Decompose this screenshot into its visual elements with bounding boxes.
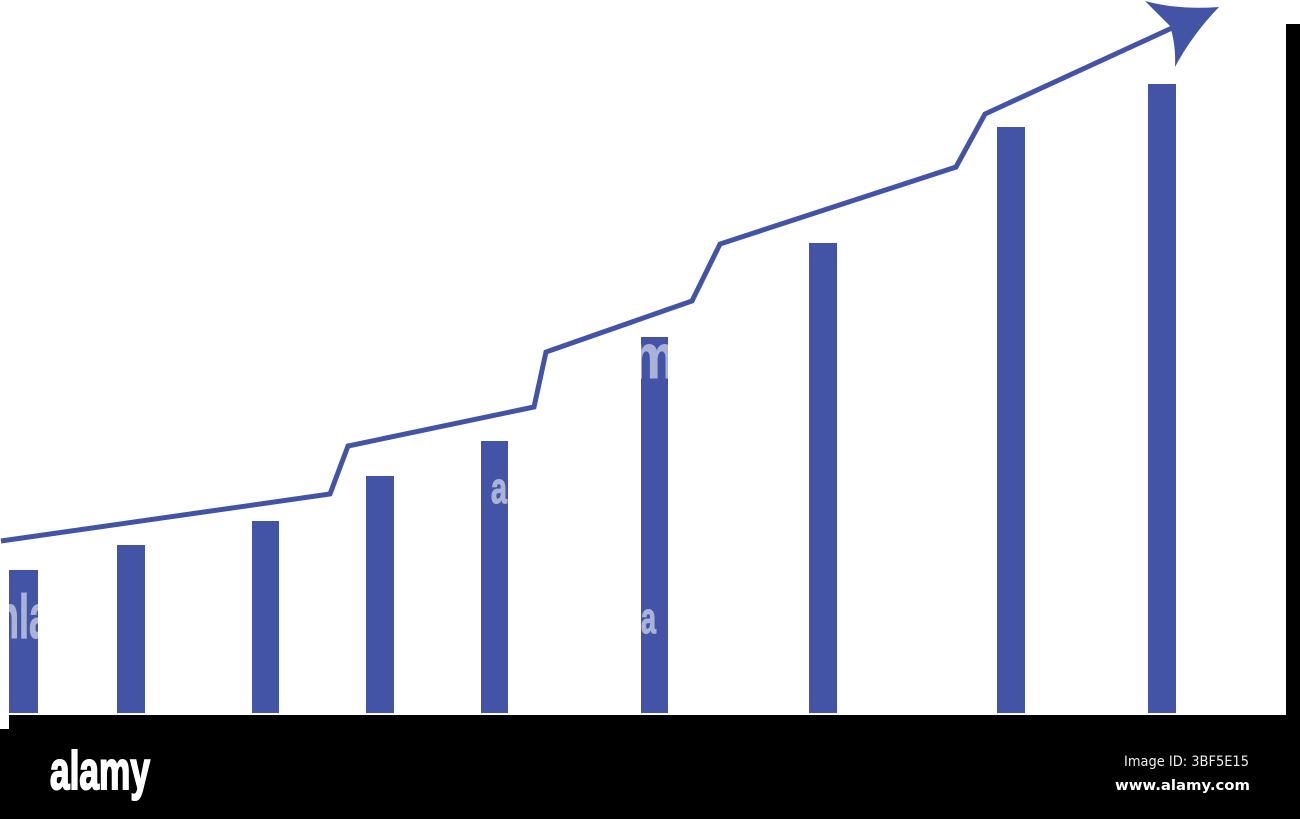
black footer band: [0, 715, 1300, 819]
bar chart: [9, 84, 1176, 713]
bar 5: [481, 441, 508, 713]
bar 6: [641, 337, 668, 713]
watermark fragments on bars: [0, 323, 676, 652]
alamy logo: alamy: [50, 741, 150, 801]
right black edge: [1286, 24, 1300, 719]
arrowhead: [1145, 1, 1219, 67]
bar 8: [997, 127, 1025, 713]
bar 2: [117, 545, 145, 713]
image id: Image ID: 3BF5E15: [1124, 754, 1249, 770]
website: www.alamy.com: [1115, 778, 1250, 794]
bar 1: [9, 570, 38, 713]
bar 9: [1148, 84, 1176, 713]
watermark: bar 6 lower: a: [641, 594, 656, 643]
watermark: bar 5: a: [491, 464, 507, 513]
bar 3: [252, 521, 279, 713]
trend line: [1, 28, 1172, 541]
bar 4: [366, 476, 394, 713]
bar 7: [809, 243, 837, 713]
